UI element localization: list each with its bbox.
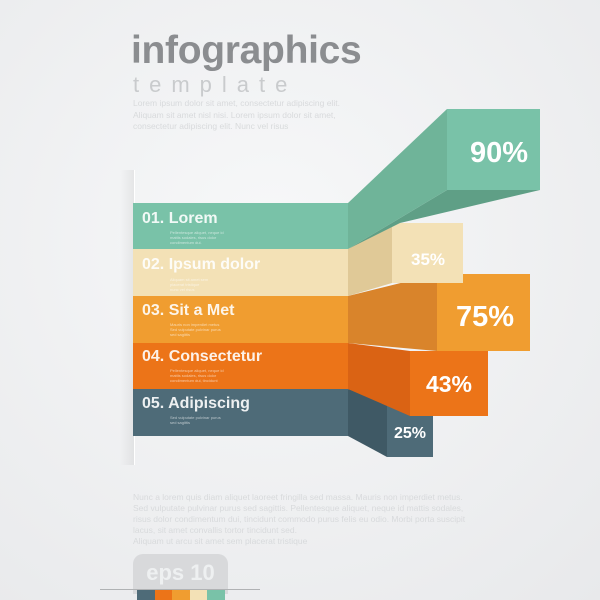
text: condimentum dui, tincidunt: [170, 378, 218, 383]
text: Sed vulputate pulvinar purus: [170, 327, 221, 332]
subtitle: template: [133, 72, 297, 97]
text: Aliquam sit amet sem: [170, 277, 208, 282]
intro text: Lorem ipsum dolor sit amet, consectetur adipiscing elit. Aliquam sit amet nisl nisi. Lorem ipsum dolor sit amet, consectetur adipiscing elit. Nunc vel risus: [133, 98, 340, 131]
bar 3 3D: 75%: 75%: [456, 301, 514, 333]
bar 2 3D: 35%: 35%: [411, 250, 445, 269]
text: sed sagittis: [170, 332, 190, 337]
text: placerat tristique: [170, 282, 199, 287]
bar 5 3D: 25%: [348, 389, 433, 457]
bar 1 3D: 90%: 90%: [470, 137, 528, 169]
text: nunc vel risus: [170, 287, 194, 292]
bottom text: Aliquam ut arcu sit amet sem placerat tristique: [133, 536, 307, 546]
text: 05. Adipiscing: [142, 395, 250, 412]
title: infographics: [131, 29, 361, 72]
text: Mauris non imperdiet metus: [170, 322, 219, 327]
text: sed sagittis: [170, 420, 190, 425]
small band texts: mattis sodales, risus dolor: [170, 235, 216, 240]
small band texts: Pellentesque aliquet, neque id: [170, 230, 224, 235]
eps badge: [133, 554, 228, 594]
small band texts: [170, 230, 224, 245]
eps badge: eps 10: [146, 560, 215, 585]
bar 4 3D: 43%: 43%: [426, 371, 472, 397]
band labels: 01. Lorem: [142, 210, 218, 227]
bar 4 3D: 43%: [348, 343, 488, 416]
paper edge shadow: [120, 170, 135, 465]
bar 2 3D: 35%: [348, 223, 463, 296]
text: Sed vulputate pulvinar purus: [170, 415, 221, 420]
bands: [133, 203, 348, 436]
text: Pellentesque aliquet, neque id: [170, 368, 224, 373]
bar 3 3D: 75%: [348, 274, 530, 351]
bar 5 3D: 25%: 25%: [394, 425, 426, 442]
bottom text: Nunc a lorem quis diam aliquet laoreet fringilla sed massa. Mauris non imperdiet metus. Sed vulputate pulvinar purus sed sagittis. Pellentesque aliquet, neque id mattis sodales, risus dolor condimentum dui, tincidunt commodo purus felis eu odio. Morbi porta suscipit lacus, sit amet convallis tortor tincidunt sed.: [133, 492, 465, 535]
color strip: [100, 589, 260, 590]
small band texts: condimentum dui.: [170, 240, 202, 245]
text: 04. Consectetur: [142, 348, 262, 365]
text: 03. Sit a Met: [142, 302, 234, 319]
bar 1 3D: 90%: [348, 109, 540, 249]
text: mattis sodales, risus dolor: [170, 373, 216, 378]
text: 02. Ipsum dolor: [142, 256, 260, 273]
